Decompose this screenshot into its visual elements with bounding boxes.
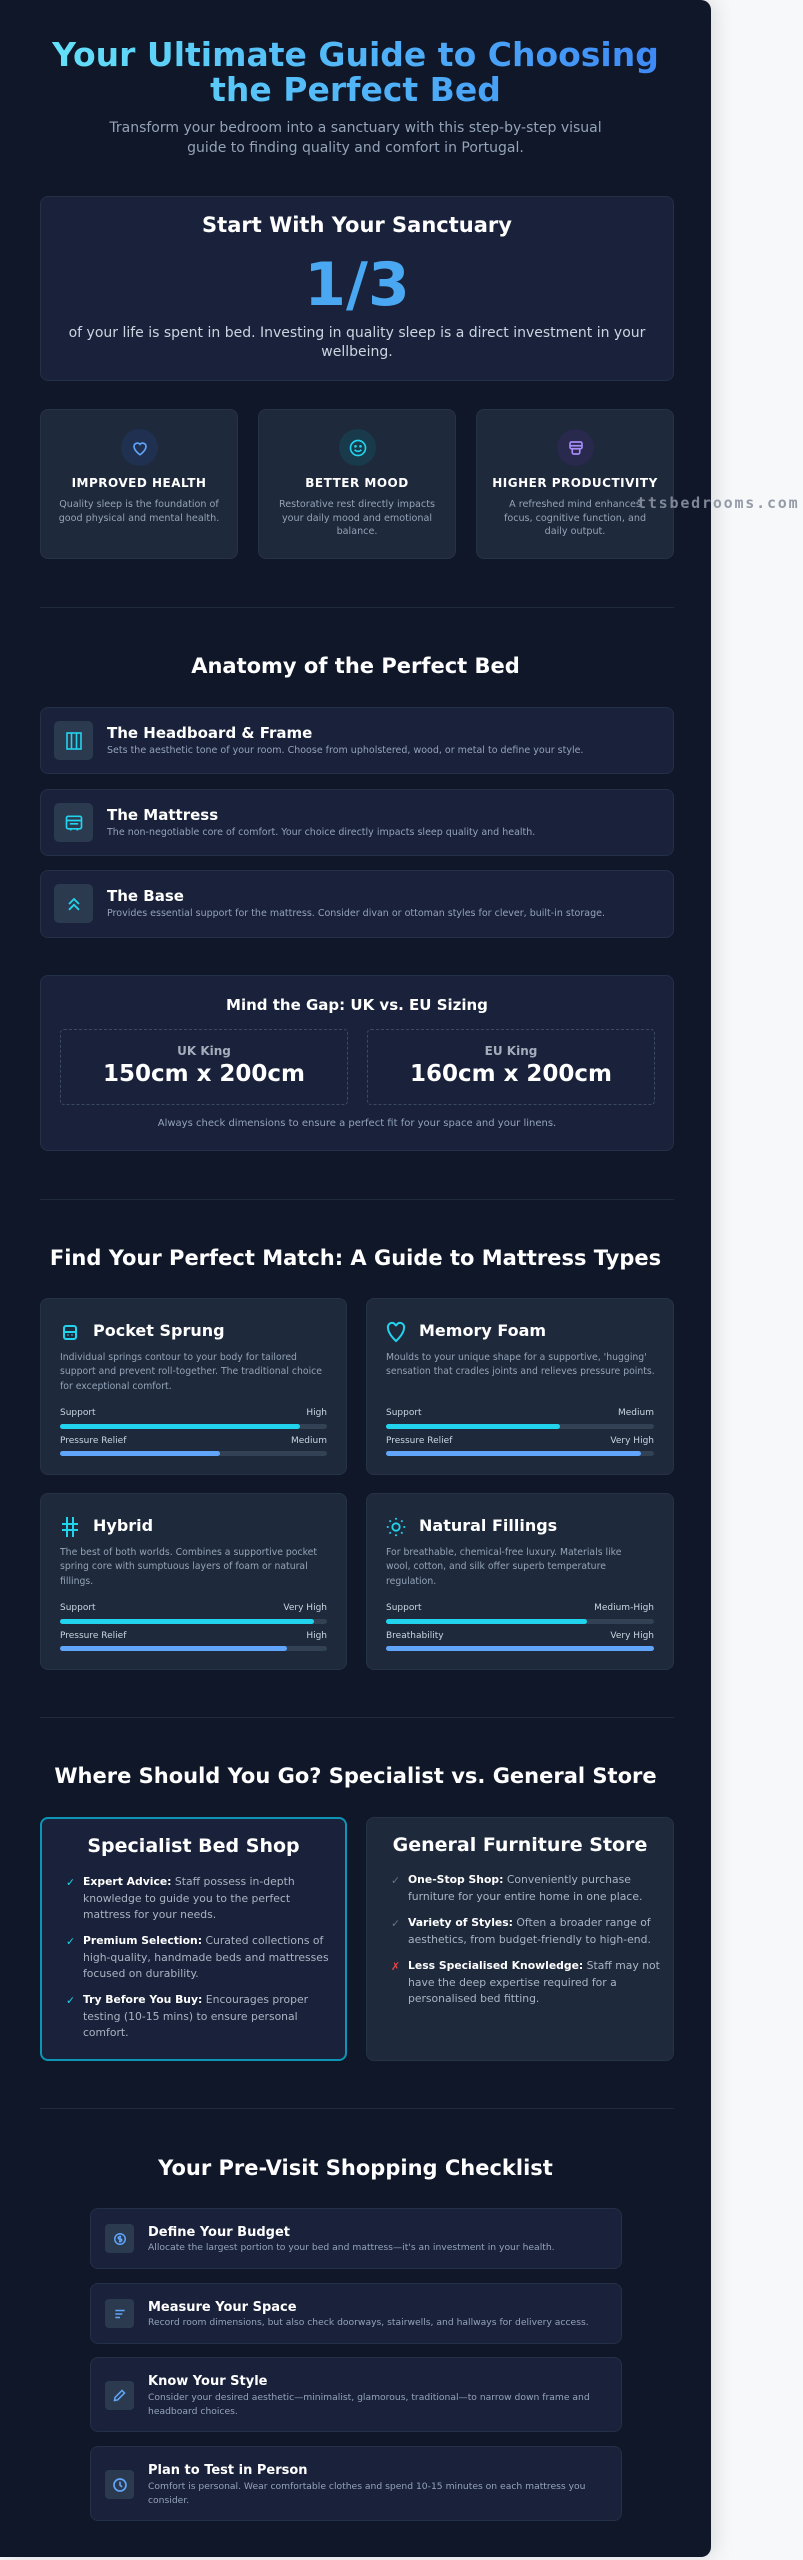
icon: hybrid: [62, 1517, 78, 1537]
row: mattress: [40, 789, 674, 856]
checklist: test: Plan to Test in Person: [148, 2463, 308, 2478]
card: natural fillings: Breathability: [386, 1631, 444, 1641]
card: natural fillings: Very High: [610, 1631, 654, 1641]
box: UK King: 150cm x 200cm: [103, 1061, 305, 1087]
icon: coin: [105, 2224, 134, 2253]
card: pocket sprung: Support: [60, 1408, 96, 1418]
card: hybrid: High: [306, 1631, 327, 1641]
card: memory foam: Very High: [610, 1436, 654, 1446]
item: variety: Variety of Styles: Often a broader range of aesthetics, from budget-friendly to high-end.: [408, 1916, 651, 1946]
heading: Start With Your Sanctuary: [202, 213, 512, 237]
card: hybrid: [40, 1493, 347, 1670]
checklist: test: [90, 2446, 622, 2521]
title: the Perfect Bed: [210, 70, 501, 109]
card: improved health: [40, 409, 238, 559]
panel: specialist: [40, 1817, 347, 2061]
row: headboard: [40, 707, 674, 774]
icon: mattress: [54, 803, 93, 842]
row: base: The Base: [107, 887, 184, 905]
row: mattress: The non-negotiable core of comfort. Your choice directly impacts sleep quality and health.: [107, 827, 535, 838]
panel: specialist: Specialist Bed Shop: [87, 1835, 300, 1857]
stat description: of your life is spent in bed. Investing in quality sleep is a direct investment in your wellbeing.: [69, 325, 645, 360]
title: Your Ultimate Guide to Choosing: [52, 35, 659, 74]
card: higher productivity: HIGHER PRODUCTIVITY: [492, 476, 658, 490]
checklist: style: Consider your desired aesthetic—minimalist, glamorous, traditional—to narrow down frame and headboard choices.: [148, 2392, 590, 2417]
item: try before: Try Before You Buy: Encourages proper testing (10-15 mins) to ensure personal comfort.: [83, 1993, 308, 2039]
card: pocket sprung: Individual springs contour to your body for tailored support and prevent roll-together. The traditional choice for exceptional comfort.: [60, 1352, 322, 1392]
heading: where to go: Where Should You Go? Specialist vs. General Store: [54, 1764, 657, 1788]
checklist: measure: [90, 2283, 622, 2344]
checklist: budget: [90, 2208, 622, 2269]
icon: headboard: [54, 721, 93, 760]
item: one-stop: One-Stop Shop: Conveniently purchase furniture for your entire home in one place.: [408, 1873, 642, 1902]
card: memory foam: Pressure Relief: [386, 1436, 452, 1446]
icon: clock: [105, 2470, 134, 2499]
card: pocket sprung: [40, 1298, 347, 1475]
card: natural fillings: For breathable, chemical-free luxury. Materials like wool, cotton, and silk offer superb temperature regulation.: [386, 1547, 621, 1587]
box: EU King: 160cm x 200cm: [410, 1061, 612, 1087]
item: premium selection: ✓: [66, 1935, 75, 1948]
row: base: Provides essential support for the mattress. Consider divan or ottoman styles for clever, built-in storage.: [107, 908, 605, 919]
card: pocket sprung: High: [306, 1408, 327, 1418]
checklist: budget: Define Your Budget: [148, 2225, 290, 2240]
card: natural fillings: [366, 1493, 674, 1670]
checklist: test: Comfort is personal. Wear comfortable clothes and spend 10-15 minutes on each mattress you consider.: [148, 2481, 586, 2506]
panel: sizing: Always check dimensions to ensure a perfect fit for your space and your linens.: [158, 1118, 556, 1129]
card: natural fillings: Natural Fillings: [419, 1516, 557, 1535]
row: headboard: Sets the aesthetic tone of your room. Choose from upholstered, wood, or metal to define your style.: [107, 745, 583, 756]
card: memory foam: Memory Foam: [419, 1321, 546, 1340]
card: memory foam: Moulds to your unique shape for a supportive, 'hugging' sensation that cradles joints and relieves pressure points.: [386, 1352, 655, 1377]
checklist: style: Know Your Style: [148, 2374, 267, 2389]
icon: memory foam: [386, 1322, 406, 1342]
card: improved health: Quality sleep is the foundation of good physical and mental health.: [59, 499, 219, 524]
checklist: measure: Record room dimensions, but also check doorways, stairwells, and hallways for delivery access.: [148, 2317, 589, 2328]
panel: sizing: [40, 975, 674, 1151]
item: less knowledge: ✗: [391, 1960, 400, 1973]
card: better mood: BETTER MOOD: [305, 476, 409, 490]
card: better mood: [258, 409, 456, 559]
item: expert advice: Expert Advice: Staff possess in-depth knowledge to guide you to the perfect mattress for your needs.: [83, 1875, 295, 1921]
checklist: style: [90, 2357, 622, 2432]
title: [0, 37, 711, 107]
panel: sizing: Mind the Gap: UK vs. EU Sizing: [226, 996, 488, 1014]
card: hybrid: Hybrid: [93, 1516, 153, 1535]
icon: pencil: [105, 2381, 134, 2410]
heading: checklist: Your Pre-Visit Shopping Checklist: [158, 2156, 553, 2180]
box: UK King: [60, 1029, 348, 1105]
stat 1/3: 1/3: [304, 250, 410, 320]
heading: mattress types: Find Your Perfect Match: A Guide to Mattress Types: [50, 1246, 661, 1270]
card: pocket sprung: Pocket Sprung: [93, 1321, 225, 1340]
card: natural fillings: Support: [386, 1603, 422, 1613]
icon: smiley: [339, 429, 376, 466]
panel: general store: [366, 1817, 674, 2061]
card: pocket sprung: Pressure Relief: [60, 1436, 126, 1446]
checklist: budget: Allocate the largest portion to your bed and mattress—it's an investment in your health.: [148, 2242, 555, 2253]
icon: pocket sprung: [63, 1325, 77, 1340]
watermark: ttsbedrooms.com: [637, 494, 799, 512]
card: hybrid: Very High: [283, 1603, 327, 1613]
row: mattress: The Mattress: [107, 806, 218, 824]
panel: general store: General Furniture Store: [393, 1834, 647, 1856]
row: headboard: The Headboard & Frame: [107, 724, 312, 742]
card: hybrid: The best of both worlds. Combines a supportive pocket spring core with sumptuous layers of foam or natural fillings.: [60, 1547, 317, 1587]
card: pocket sprung: Medium: [291, 1436, 327, 1446]
icon: base: [54, 884, 93, 923]
item: try before: ✓: [66, 1994, 75, 2007]
card: hybrid: Pressure Relief: [60, 1631, 126, 1641]
card: higher productivity: A refreshed mind enhances focus, cognitive function, and daily output.: [504, 499, 646, 537]
panel: sanctuary: [40, 196, 674, 381]
card: memory foam: Medium: [618, 1408, 654, 1418]
item: less knowledge: Less Specialised Knowledge: Staff may not have the deep expertise required for a personalised bed fitting.: [408, 1959, 660, 2005]
item: one-stop: ✓: [391, 1874, 400, 1887]
item: premium selection: Premium Selection: Curated collections of high-quality, handmade beds and mattresses focused on durability.: [83, 1934, 329, 1980]
row: base: [40, 870, 674, 938]
icon: sun: [386, 1518, 406, 1536]
card: memory foam: [366, 1298, 674, 1475]
box: EU King: [367, 1029, 655, 1105]
item: expert advice: ✓: [66, 1876, 75, 1889]
subtitle: Transform your bedroom into a sanctuary with this step-by-step visual guide to finding quality and comfort in Portugal.: [109, 120, 602, 156]
icon: lines: [105, 2299, 134, 2328]
box: EU King: EU King: [485, 1044, 537, 1058]
box: UK King: UK King: [177, 1044, 231, 1058]
card: natural fillings: Medium-High: [594, 1603, 654, 1613]
card: hybrid: Support: [60, 1603, 96, 1613]
card: improved health: IMPROVED HEALTH: [72, 476, 206, 490]
card: better mood: Restorative rest directly impacts your daily mood and emotional balance.: [279, 499, 435, 537]
card: higher productivity: [476, 409, 674, 559]
icon: productivity: [557, 429, 594, 466]
card: memory foam: Support: [386, 1408, 422, 1418]
checklist: measure: Measure Your Space: [148, 2300, 297, 2315]
heading: anatomy: Anatomy of the Perfect Bed: [191, 654, 520, 678]
item: variety: ✓: [391, 1917, 400, 1930]
icon: heart: [121, 429, 158, 466]
